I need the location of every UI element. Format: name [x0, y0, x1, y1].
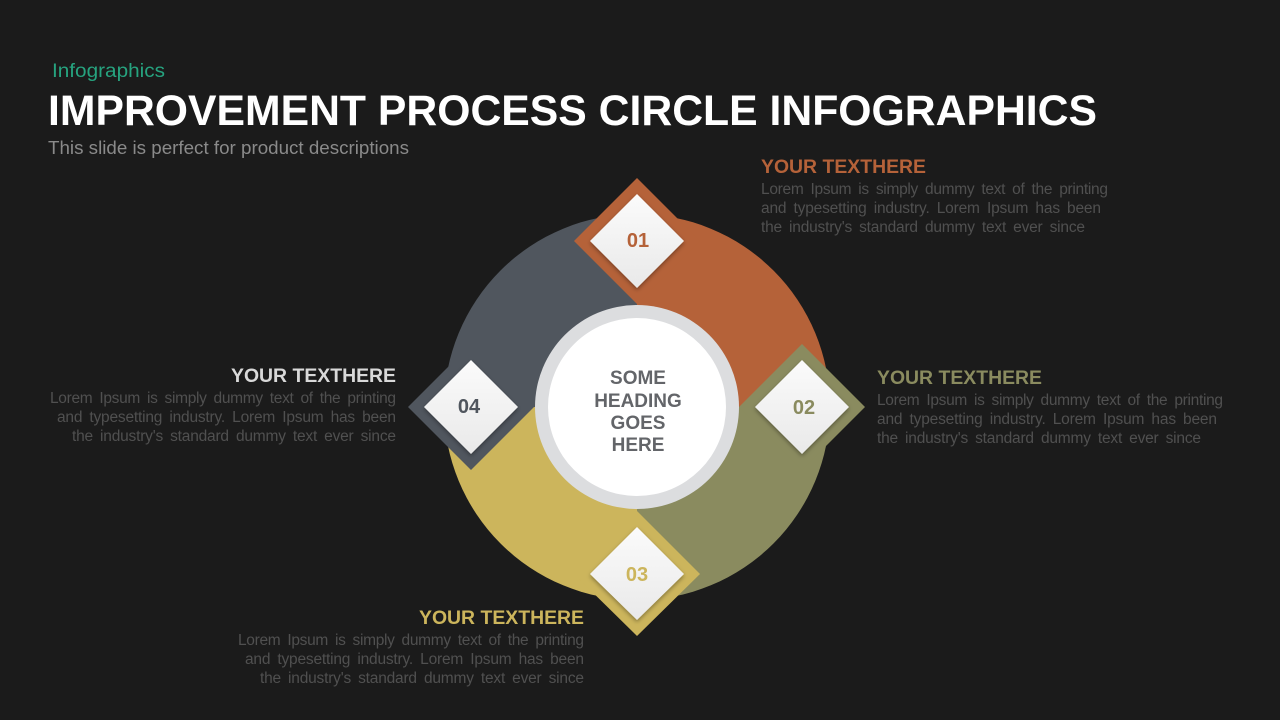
diamond 01: 01 [627, 230, 649, 252]
text block 04: and typesetting industry. Lorem Ipsum has been [57, 409, 396, 426]
eyebrow label: Infographics [52, 61, 165, 82]
text block 01 [761, 157, 1108, 236]
diamond 04 [408, 344, 534, 470]
text block 04: YOUR TEXTHERE [231, 366, 396, 387]
text block 02: YOUR TEXTHERE [877, 368, 1042, 389]
diamond 01 [574, 178, 700, 304]
text block 01: and typesetting industry. Lorem Ipsum has been [761, 200, 1101, 217]
text block 01: YOUR TEXTHERE [761, 157, 926, 178]
text block 03 [238, 608, 584, 687]
text block 03: YOUR TEXTHERE [419, 608, 584, 629]
text block 02: and typesetting industry. Lorem Ipsum has been [877, 411, 1217, 428]
text block 01: the industry's standard dummy text ever since [761, 219, 1085, 236]
centre circle: GOES [611, 413, 665, 434]
text block 04 [50, 366, 396, 445]
diamond 03: 03 [626, 564, 648, 586]
centre circle: SOME [610, 368, 666, 389]
text block 03: Lorem Ipsum is simply dummy text of the printing [238, 632, 584, 649]
diamond 04: 04 [458, 396, 481, 418]
process circle diagram [408, 178, 865, 636]
text block 02: the industry's standard dummy text ever since [877, 430, 1201, 447]
centre circle: HERE [612, 435, 664, 456]
text block 02: Lorem Ipsum is simply dummy text of the printing [877, 392, 1223, 409]
subtitle: This slide is perfect for product descriptions [48, 138, 409, 158]
text block 01: Lorem Ipsum is simply dummy text of the printing [761, 181, 1108, 198]
text block 04: the industry's standard dummy text ever since [72, 428, 396, 445]
segment: grey quadrant [444, 214, 637, 407]
diamond 03 [574, 511, 700, 636]
text block 04: Lorem Ipsum is simply dummy text of the printing [50, 390, 396, 407]
segment: orange quadrant [637, 214, 830, 407]
title: IMPROVEMENT PROCESS CIRCLE INFOGRAPHICS [48, 87, 1097, 135]
text block 03: and typesetting industry. Lorem Ipsum has been [245, 651, 584, 668]
diamond 02 [739, 344, 865, 470]
centre circle [535, 305, 739, 509]
text block 03: the industry's standard dummy text ever since [260, 670, 584, 687]
segment: olive quadrant [637, 407, 830, 600]
text block 02 [877, 368, 1223, 447]
diamond 02: 02 [793, 397, 815, 419]
segment: yellow quadrant [444, 407, 637, 600]
centre circle: HEADING [594, 391, 682, 412]
